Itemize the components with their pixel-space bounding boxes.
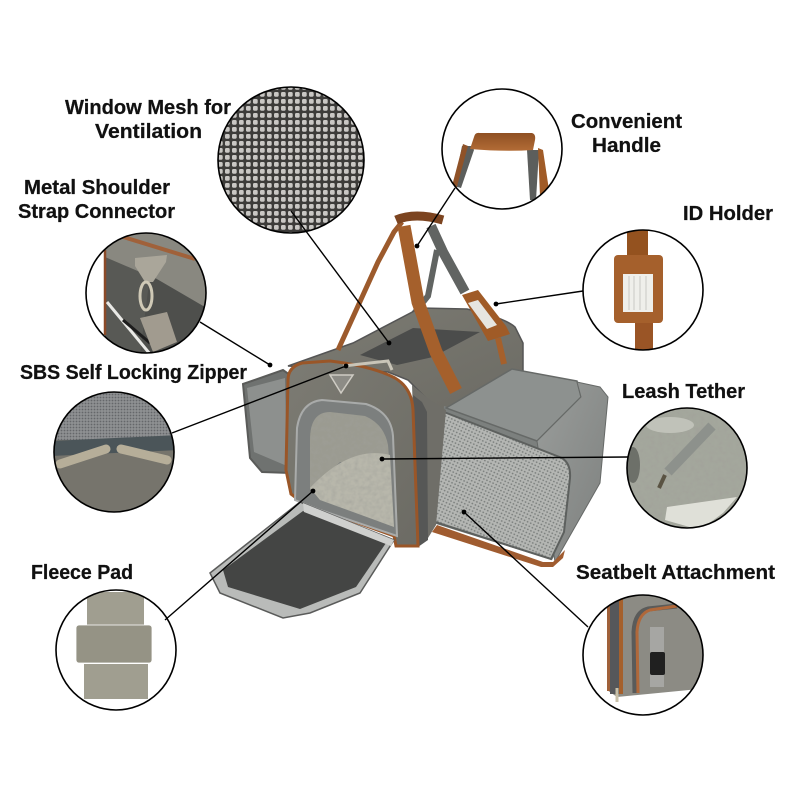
leader: leash [380,457,628,461]
mesh circle: Window Mesh [218,87,364,233]
leader: seatbelt [462,510,588,627]
carrier front panel [286,361,418,546]
door interior back wall [310,412,390,490]
left expansion wing [243,370,290,473]
gusset zipper strip [413,395,428,547]
heading: Strap Connector: Strap Connector [18,201,175,223]
leader: ID holder [494,291,583,306]
leader: connector [200,322,272,367]
heading: SBS Self Locking Zipper: SBS Self Locking Zipper [20,362,247,384]
front door flap [210,502,394,618]
right expansion wing side [537,382,608,562]
heading: Leash Tether: Leash Tether [622,381,745,403]
gusset tweed strip [412,385,446,547]
front D-ring and zipper pulls [330,361,392,393]
fleece pad circle [56,590,176,710]
heading: Ventilation: Ventilation [95,121,202,143]
leash tether circle [626,408,747,530]
wing bottom leather trim [432,525,565,567]
leader: mesh [291,211,391,345]
seatbelt circle [583,590,710,715]
heading: Handle: Handle [592,135,661,157]
fleece pad inside [310,453,394,527]
heading: Fleece Pad: Fleece Pad [31,562,133,584]
wing backing [436,406,572,560]
heading: Metal Shoulder: Metal Shoulder [24,177,170,199]
heading: Seatbelt Attachment: Seatbelt Attachment [576,562,775,584]
heading: Window Mesh: Window Mesh for [65,97,231,119]
carry handles [338,216,504,391]
top zip pocket [360,328,480,365]
wing mesh face [435,412,570,559]
ID holder circle [583,228,703,352]
carrier top panel [288,308,523,412]
heading: Convenient: Convenient [571,111,682,133]
right expansion wing top [446,369,581,441]
metal connector circle [86,232,210,354]
handle circle [442,89,562,209]
door opening surround [295,400,397,536]
leader: fleece [165,489,315,620]
back grey handle strap [400,226,465,331]
heading: ID Holder: ID Holder [683,203,773,225]
ID tag [462,290,510,341]
zipper circle [50,390,180,512]
pet carrier bag [210,216,608,618]
leader: zipper [172,364,348,433]
leader: handle [415,188,455,248]
